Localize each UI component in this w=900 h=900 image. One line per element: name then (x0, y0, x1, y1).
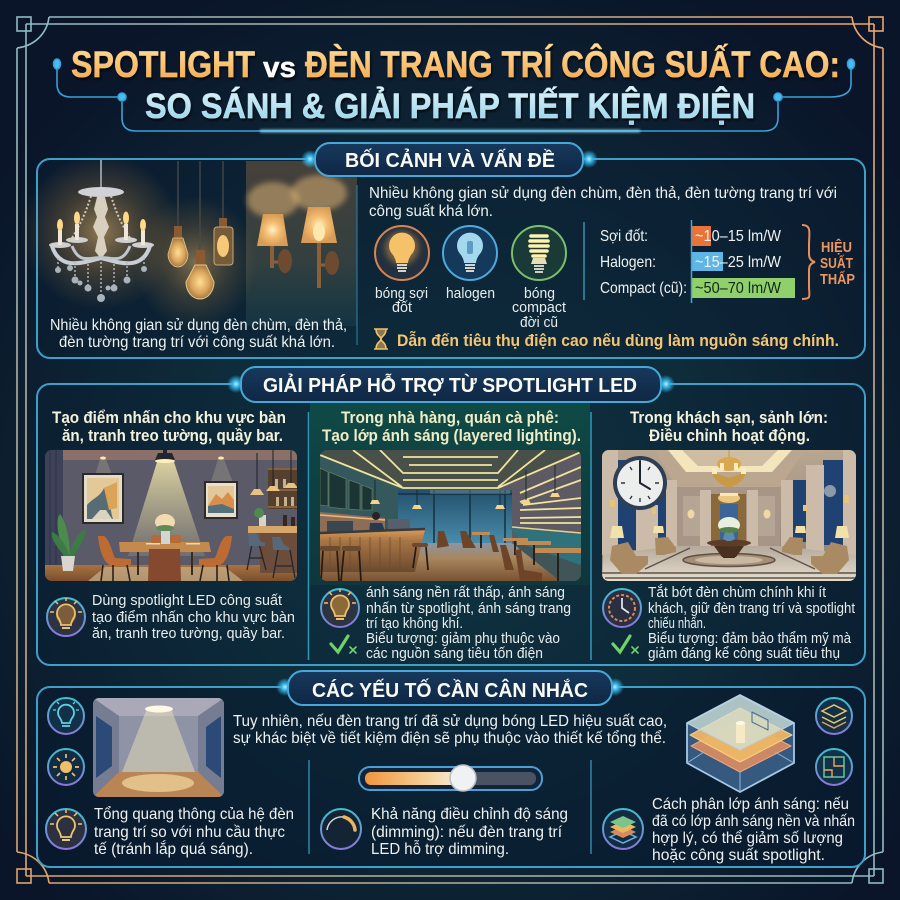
icon: check and cross column 2 (331, 636, 356, 653)
divider (356, 185, 358, 345)
chart: luminous efficacy bars: Sợi đốt: (600, 228, 648, 245)
title line 2: SO SÁNH & GIẢI PHÁP TIẾT KIỆM ĐIỆN (145, 86, 755, 126)
text: dimming: Khả năng điều chỉnh độ sáng (371, 806, 568, 823)
text: layering: hoặc công suất spotlight. (652, 847, 825, 864)
icon: wall clock (613, 456, 667, 510)
icon: stacked outlines (816, 698, 852, 734)
text: dimming: LED hỗ trợ dimming. (371, 839, 509, 858)
text: column 2 body (366, 584, 571, 662)
chart: luminous efficacy bars: Compact (cũ): (600, 280, 687, 297)
text: luminous flux: tế (tránh lắp quá sáng). (94, 839, 253, 858)
callout: consequence: Dẫn đến tiêu thụ điện cao nếu dùng làm nguồn sáng chính. (397, 331, 839, 350)
text: layering: Cách phân lớp ánh sáng: nếu (652, 796, 849, 813)
brace and low efficiency label: THẤP (820, 271, 855, 288)
column 1 heading: Tạo điểm nhấn cho khu vực bàn (52, 409, 286, 427)
column 3 heading (630, 409, 828, 445)
icon: compact bulb (512, 226, 566, 280)
column highlight (310, 403, 590, 585)
text: layering: hợp lý, có thể giảm số lượng (652, 829, 843, 847)
text: intro: Tuy nhiên, nếu đèn trang trí đã sử dụng bóng LED hiệu suất cao, (233, 713, 667, 730)
heading: bối cảnh và vấn đề (301, 143, 598, 176)
column 3 heading: Điều chỉnh hoạt động. (649, 427, 810, 445)
panel: bối cảnh và vấn đề (21, 154, 865, 358)
text: luminous flux: Tổng quang thông của hệ đèn (94, 805, 294, 823)
heading: bối cảnh và vấn đề: BỐI CẢNH VÀ VẤN ĐỀ (345, 148, 555, 172)
divider (583, 222, 585, 300)
image: hotel lobby (600, 450, 858, 581)
text: column 3 body: chiếu nhấn. (648, 615, 706, 632)
title line 1 (71, 43, 840, 85)
heading: các yếu tố: CÁC YẾU TỐ CẦN CÂN NHẮC (312, 678, 588, 702)
title line 1: SPOTLIGHT (71, 44, 255, 85)
text: luminous flux (94, 805, 294, 858)
text: column 1 body (92, 592, 295, 642)
text: column 3 body: giảm đáng kể công suất tiêu thụ (648, 645, 840, 662)
image: over-lit room (93, 698, 224, 797)
icon: incandescent bulb (375, 226, 429, 280)
icon: money sun (48, 749, 84, 785)
text: intro (369, 185, 837, 220)
icon: wall sconces (257, 207, 339, 288)
image: chandelier, pendants and wall sconces (21, 154, 357, 328)
heading: giải pháp: GIẢI PHÁP HỖ TRỢ TỪ SPOTLIGHT LED (263, 373, 637, 397)
chart: luminous efficacy bars: ~10–15 lm/W (695, 228, 782, 245)
text: column 1 body: ăn, tranh treo tường, quầy bar. (92, 625, 285, 642)
text: layering: đã có lớp ánh sáng nền và nhấn (652, 813, 855, 830)
title connector lines (54, 59, 854, 132)
icon: dimmer slider (359, 765, 542, 791)
column 2 heading: Trong nhà hàng, quán cà phê: (341, 409, 559, 427)
text: column 3 body: Biểu tượng: đảm bảo thẩm mỹ mà (648, 630, 852, 647)
text: intro: công suất khá lớn. (369, 203, 493, 220)
labels: bulb names: halogen (446, 285, 495, 302)
text: panel caption: đèn tường trang trí với công suất khá lớn. (59, 334, 335, 351)
icon: colored layers (603, 809, 643, 849)
chart: luminous efficacy bars (600, 220, 795, 303)
icon: dimming arc (321, 809, 361, 849)
text: dimming: (dimming): nếu đèn trang trí (371, 824, 563, 841)
panel: các yếu tố cần cân nhắc (37, 687, 865, 867)
text: panel caption (50, 317, 347, 351)
text: intro: sự khác biệt về tiết kiệm điện sẽ phụ thuộc vào thiết kế tổng thể. (233, 729, 666, 747)
title line 1: vs (263, 52, 296, 84)
icon: chandelier (49, 160, 154, 302)
image: dining room with spotlight (45, 450, 298, 581)
text: dimming (371, 806, 568, 858)
icon: hourglass (374, 329, 388, 349)
text: layering (652, 796, 855, 864)
text: column 3 body (648, 584, 856, 662)
brace and low efficiency label: HIỆU (821, 238, 852, 256)
text: column 3 body: Tắt bớt đèn chùm chính khi ít (648, 584, 827, 601)
text: luminous flux: trang trí so với nhu cầu thực (94, 824, 285, 841)
chart: luminous efficacy bars: ~50–70 lm/W (695, 280, 782, 297)
icon: check and cross column 3 (613, 636, 638, 653)
icon: halogen bulb (443, 226, 497, 280)
text: column 1 body: tạo điểm nhấn cho khu vực bàn (92, 609, 295, 626)
icon: warm bulb (46, 809, 86, 849)
icon: spotlight bulb column 1 (47, 598, 85, 636)
column 3 heading: Trong khách sạn, sảnh lớn: (630, 409, 828, 427)
labels: bulb names: đốt (392, 299, 413, 316)
text: column 2 body: Biểu tượng: giảm phụ thuộc vào (366, 630, 560, 647)
labels: bulb names: compact (512, 299, 567, 316)
chart: luminous efficacy bars: ~15–25 lm/W (695, 254, 782, 271)
brace and low efficiency label: SUẤT (820, 255, 853, 272)
labels: bulb names: đời cũ (520, 314, 558, 331)
heading: giải pháp (227, 367, 675, 402)
text: column 3 body: khách, giữ đèn trang trí và spotlight (648, 600, 856, 617)
labels: bulb names (375, 285, 567, 331)
brace and low efficiency label (802, 225, 855, 299)
chart: luminous efficacy bars: Halogen: (600, 254, 656, 271)
column 1 heading (52, 409, 286, 445)
text: intro (233, 713, 667, 747)
text: panel caption: Nhiều không gian sử dụng đèn chùm, đèn thả, (50, 317, 347, 334)
diagram: isometric light layers (687, 695, 794, 792)
labels: bulb names: bóng (524, 285, 555, 302)
icon: clock column 3 (603, 589, 641, 627)
icon: pendant bulbs (168, 161, 233, 299)
panel: giải pháp (37, 384, 865, 665)
column 2 heading: Tạo lớp ánh sáng (layered lighting). (322, 427, 581, 445)
text: column 2 body: ánh sáng nền rất thấp, ánh sáng (366, 584, 565, 601)
text: column 1 body: Dùng spotlight LED công suất (92, 592, 283, 609)
text: intro: Nhiều không gian sử dụng đèn chùm, đèn thả, đèn tường trang trí với (369, 185, 837, 202)
icon: spotlight bulb column 2 (321, 589, 359, 627)
text: column 2 body: các nguồn sáng tiêu tốn điện (366, 645, 543, 662)
icon: blue bulb (48, 698, 84, 734)
text: column 2 body: trí tạo không khí. (366, 615, 463, 632)
text: column 2 body: nhấn từ spotlight, ánh sáng trang (366, 600, 571, 617)
column 2 heading (322, 409, 581, 445)
title block (54, 43, 854, 132)
image: cafe with layered lighting (320, 450, 581, 581)
heading: các yếu tố (276, 671, 624, 705)
icon: floor plan (816, 749, 852, 785)
column 1 heading: ăn, tranh treo tường, quầy bar. (62, 427, 283, 445)
labels: bulb names: bóng sợi (375, 285, 428, 302)
